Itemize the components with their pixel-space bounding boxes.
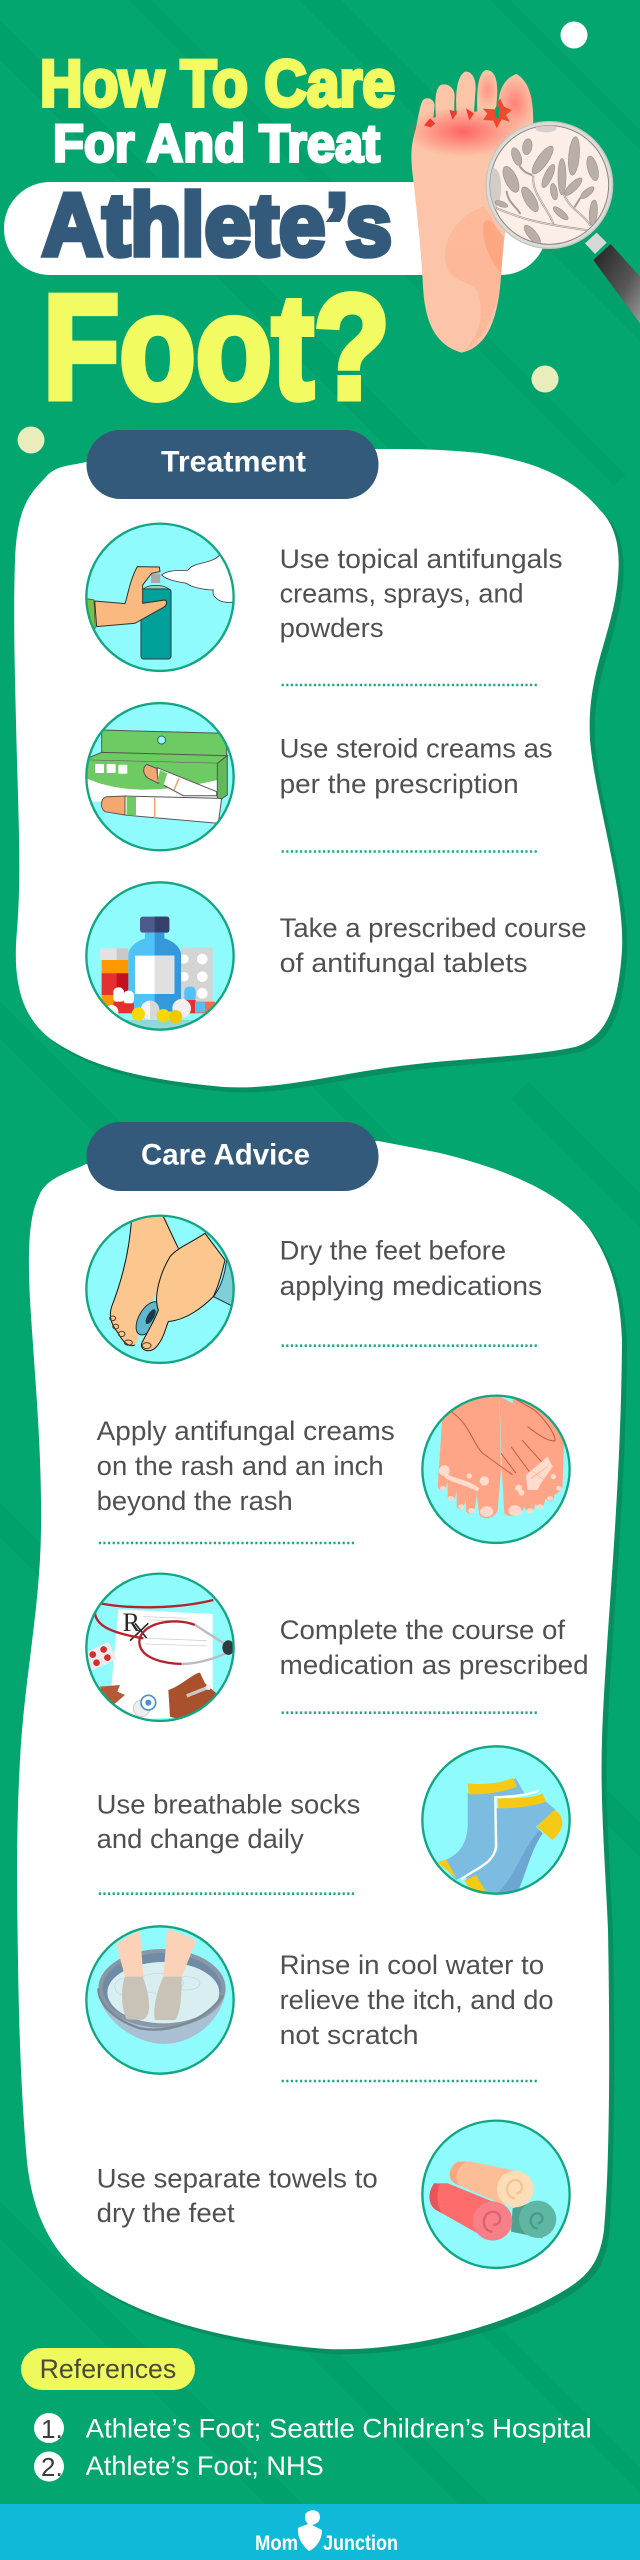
icon: steroid cream tubes xyxy=(83,703,234,850)
foot xyxy=(405,70,535,353)
title banner xyxy=(4,182,547,275)
decorative dot: cream left xyxy=(18,426,44,454)
footer bar xyxy=(0,2504,640,2560)
title line: For And Treat: For And Treat xyxy=(53,114,380,174)
icon: prescription xyxy=(84,1574,234,1721)
decorative dot: white xyxy=(560,22,588,48)
logo: MomJunction xyxy=(255,2510,398,2555)
text: apply creams: Apply antifungal creams xyxy=(97,1416,395,1446)
icon: drying feet xyxy=(86,1213,237,1363)
text: steroid creams: per the prescription xyxy=(280,769,519,799)
references xyxy=(21,2348,592,2482)
logo: MomJunction: Mom xyxy=(255,2532,298,2555)
text: apply creams: beyond the rash xyxy=(97,1486,293,1516)
text: separate towels: dry the feet xyxy=(97,2198,235,2228)
reference 1: 1. xyxy=(41,2414,63,2444)
text: breathable socks: and change daily xyxy=(97,1824,304,1854)
icon: rolled towels xyxy=(422,2121,570,2268)
text: topical antifungals: creams, sprays, and xyxy=(280,578,524,608)
text: complete the course xyxy=(280,1615,589,1680)
text: apply creams xyxy=(97,1416,395,1516)
text: breathable socks xyxy=(97,1790,360,1854)
text: rinse in cool water: not scratch xyxy=(280,2020,419,2050)
icon: prescription: R xyxy=(123,1608,141,1637)
text: complete the course: Complete the course of xyxy=(280,1615,566,1645)
icon: cream on toes xyxy=(422,1392,570,1543)
text: steroid creams xyxy=(280,734,553,799)
text: antifungal tablets: of antifungal tablets xyxy=(280,948,528,978)
illustration: foot with magnifier xyxy=(405,70,640,353)
text: antifungal tablets: Take a prescribed course xyxy=(280,913,587,943)
text: dry the feet: applying medications xyxy=(280,1271,542,1301)
text: rinse in cool water xyxy=(280,1950,554,2050)
icon: socks xyxy=(422,1746,570,1897)
logo: MomJunction: Junction xyxy=(323,2532,398,2555)
reference 1: Athlete’s Foot; Seattle Children’s Hospital xyxy=(86,2414,592,2444)
text: rinse in cool water: relieve the itch, and do xyxy=(280,1985,554,2015)
heading: Treatment: Treatment xyxy=(161,446,306,478)
text: rinse in cool water: Rinse in cool water to xyxy=(280,1950,544,1980)
references heading: References xyxy=(40,2354,176,2384)
heading: Care Advice xyxy=(86,1122,378,1191)
text: topical antifungals: powders xyxy=(280,613,384,643)
decorative dot: cream right xyxy=(532,366,558,392)
reference 2: Athlete’s Foot; NHS xyxy=(86,2451,324,2481)
icon: rinsing feet in basin xyxy=(86,1926,234,2074)
text: apply creams: on the rash and an inch xyxy=(97,1451,384,1481)
text: dry the feet xyxy=(280,1236,542,1301)
panel: treatment xyxy=(14,430,627,1092)
text: steroid creams: Use steroid creams as xyxy=(280,734,553,764)
title line: Foot?: Foot? xyxy=(43,265,390,430)
text: separate towels xyxy=(97,2164,378,2228)
title line: Athlete's: Athlete’s xyxy=(42,175,392,274)
text: complete the course: medication as prescribed xyxy=(280,1650,589,1680)
magnifier handle xyxy=(593,244,640,323)
references heading xyxy=(21,2348,195,2390)
text: topical antifungals xyxy=(280,544,563,643)
icon: spray can xyxy=(85,524,240,671)
heading: Treatment xyxy=(86,430,378,499)
text: antifungal tablets xyxy=(280,913,587,978)
heading: Care Advice: Care Advice xyxy=(141,1138,310,1172)
text: breathable socks: Use breathable socks xyxy=(97,1790,360,1820)
panel: care advice xyxy=(17,1122,627,2354)
text: topical antifungals: Use topical antifungals xyxy=(280,544,563,574)
magnifier lens with fungus xyxy=(486,122,613,248)
text: dry the feet: Dry the feet before xyxy=(280,1236,506,1266)
title line: How To Care: How To Care xyxy=(40,46,395,120)
reference 2: 2. xyxy=(41,2452,63,2482)
text: separate towels: Use separate towels to xyxy=(97,2164,378,2194)
title xyxy=(4,46,547,430)
icon: antifungal tablets xyxy=(86,882,234,1035)
